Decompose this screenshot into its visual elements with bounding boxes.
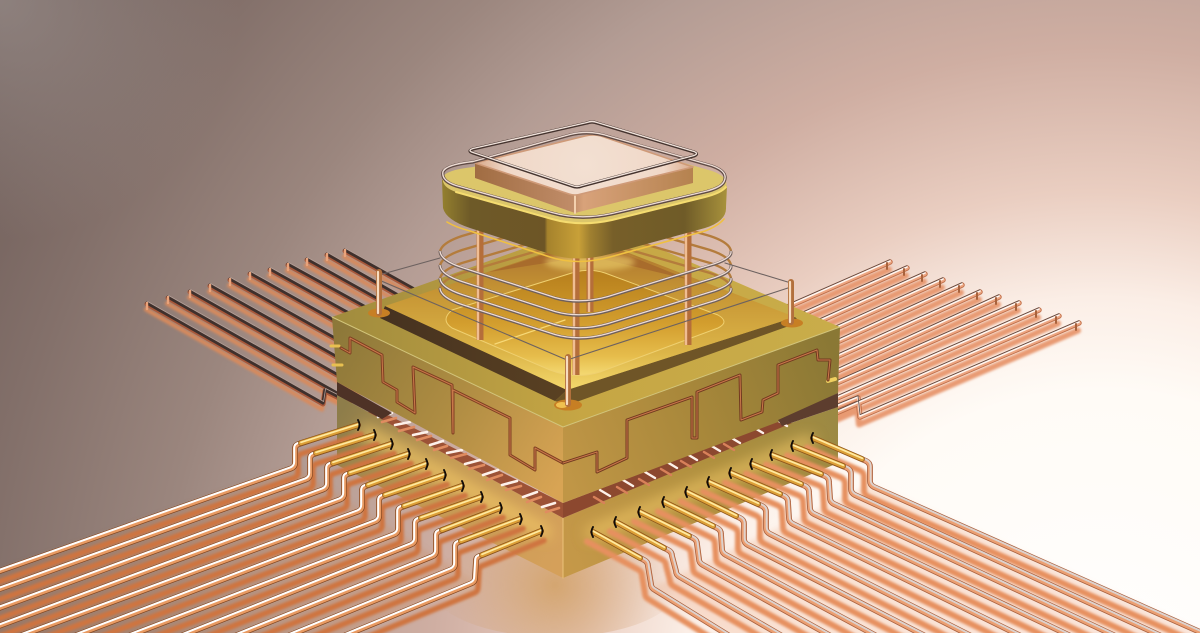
fence wires and corner posts bbox=[368, 258, 803, 410]
gap between base layers with inner wiring bbox=[368, 410, 792, 518]
floor tint under lower wires bbox=[0, 467, 1200, 633]
gold tray bbox=[442, 138, 727, 262]
coil wires: back half bbox=[440, 200, 731, 289]
circuit trace: left face bbox=[341, 338, 563, 470]
coil wires: front half bbox=[440, 252, 731, 338]
wires: lower left bundle bbox=[0, 420, 544, 633]
floor glow under chip bbox=[430, 533, 680, 633]
copper cap block bbox=[475, 135, 693, 213]
raised plate with recess bbox=[380, 238, 800, 405]
upper block of chip base bbox=[331, 317, 840, 503]
wires: upper left bundle bbox=[146, 248, 441, 410]
wire rectangle above cap bbox=[470, 122, 696, 187]
wire ring around tray bbox=[443, 132, 725, 217]
wires: lower right bundle bbox=[587, 433, 1200, 633]
wires: upper right bundle bbox=[759, 260, 1079, 424]
glow around wire sockets bbox=[366, 432, 808, 533]
circuit trace: right face bbox=[563, 350, 830, 472]
lower block of chip base bbox=[337, 395, 838, 578]
top surface of base bbox=[332, 222, 840, 427]
support posts bbox=[478, 225, 688, 375]
